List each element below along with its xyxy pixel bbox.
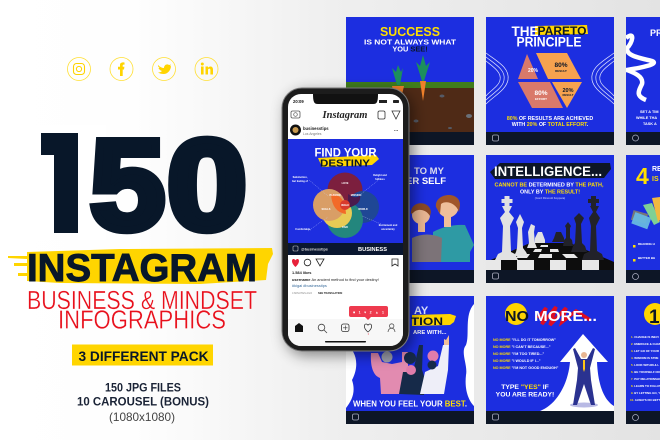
post header (290, 124, 399, 136)
chart: venn diagram: Comfortable, (295, 228, 311, 231)
yellow brush (318, 155, 379, 167)
big number 150: 0 (167, 114, 247, 257)
body text: TASK A (643, 122, 657, 126)
icon: footer instagram (492, 135, 498, 141)
yellow brush stroke (8, 248, 273, 284)
list: NO MORE "I WOULD IF I..." (493, 359, 541, 363)
chart: venn diagram: fullness (375, 178, 385, 181)
bullet list (633, 242, 655, 262)
caption: WHEN YOU FEEL YOUR BEST. (353, 400, 467, 408)
file details: 10 CAROUSEL (BONUS) (77, 396, 209, 408)
illustration: older man (433, 195, 474, 262)
post caption: username An ancient method to find your destiny! (292, 277, 379, 282)
heading: NO (505, 309, 529, 325)
soil (402, 88, 474, 132)
badge: 3 different pack: 3 DIFFERENT PACK (78, 348, 208, 364)
subheading (364, 40, 456, 52)
phone body (282, 88, 409, 351)
footer bar (486, 411, 614, 424)
subheading: ARE WITH... (413, 330, 447, 336)
heading: IS (652, 176, 659, 183)
footer bar (486, 270, 614, 283)
post footer strip: @businesstips (301, 248, 328, 252)
subheading: (Gord Rimondi Koppara) (535, 196, 565, 200)
chart: venn diagram: IKIGAI (341, 204, 349, 207)
chart: pareto shapes: 20% (528, 68, 539, 74)
icon: footer instagram (492, 273, 498, 279)
big number 150: 5 (90, 114, 165, 257)
chart: pareto shapes: 80% (534, 90, 548, 97)
post caption: SEE TRANSLATION (318, 291, 342, 295)
footer bar (626, 132, 660, 145)
icon: twitter (152, 58, 176, 80)
list: NO MORE "I CAN'T BECAUSE..." (493, 345, 551, 349)
icon: footer instagram (492, 414, 498, 420)
illustration: stacked books (631, 197, 660, 229)
status bar: 20:09 (293, 99, 304, 104)
heading: infographics: INFOGRAPHICS (58, 304, 226, 334)
panel: intelligence card (486, 155, 614, 283)
subheading: CANNOT BE DETERMINED BY THE PATH, (494, 182, 604, 188)
illustration: white arrow (540, 334, 614, 411)
chart: pareto shapes: EFFORT (535, 97, 547, 101)
post title: FIND YOUR (314, 148, 377, 160)
chart: venn diagram: Satisfaction, (293, 176, 308, 179)
heading: ER SELF (406, 176, 446, 187)
caption: WITH 20% OF TOTAL EFFORT. (512, 122, 589, 128)
white side brush (346, 304, 474, 408)
panel: success card (346, 17, 474, 145)
list: 10. ALWAYS DO BETT (630, 398, 660, 402)
notification bubble (349, 306, 388, 320)
heading (652, 166, 660, 181)
yellow circle (644, 303, 660, 325)
panel: cropped priority card (626, 17, 660, 145)
post footer strip (288, 243, 403, 255)
chart: pareto shapes: RESULT (555, 69, 567, 73)
red scribble (538, 307, 590, 325)
panel: no more card (486, 296, 614, 424)
icon: facebook (110, 58, 133, 80)
body text (636, 110, 658, 126)
phone mockup (282, 88, 409, 351)
heading (505, 309, 597, 325)
subheading: YOU SEE! (392, 44, 428, 54)
big number: 4 (636, 163, 649, 189)
body text: WHILE THA (636, 116, 657, 120)
subheading: ONLY BY THE RESULT! (520, 190, 580, 196)
heading (411, 305, 443, 328)
icon: small carrot (392, 65, 404, 92)
post title (314, 148, 377, 170)
chart: venn diagram: PAID (342, 226, 348, 229)
heading: PRINCIPLE (516, 34, 582, 50)
illustration: businessman (570, 348, 598, 408)
caption: 80% OF RESULTS ARE ACHIEVED (507, 116, 593, 122)
status bar (293, 94, 399, 104)
illustration: white chess pieces (495, 196, 545, 260)
body text: SET A TIM (640, 110, 658, 114)
bullet list: READING H (638, 242, 655, 246)
call to action: YOU ARE READY! (496, 392, 554, 398)
post image (288, 139, 403, 243)
illustration: chess board (486, 243, 614, 270)
yellow brush (412, 314, 456, 326)
file details: (1080x1080) (109, 410, 175, 424)
icon: large carrot (416, 55, 430, 101)
icon: instagram (68, 58, 90, 80)
footer bar (626, 270, 660, 283)
social icons (68, 58, 218, 80)
caption (507, 116, 593, 126)
chart: pareto shapes: RESULT (563, 93, 574, 97)
chart: venn diagram: Excitement and (379, 224, 398, 227)
list: NO MORE "I'M NOT GOOD ENOUGH" (493, 366, 559, 370)
footer bar (346, 411, 474, 424)
file details (77, 382, 209, 424)
post actions (292, 259, 398, 267)
list (493, 338, 559, 370)
footer bar (410, 132, 474, 145)
footer bar (410, 270, 474, 283)
post caption (292, 270, 379, 295)
post header: ... (394, 127, 399, 133)
chart: venn diagram: but feeling of (292, 180, 308, 183)
call to action (496, 384, 554, 398)
chart: pareto shapes (518, 53, 582, 108)
grass strip (346, 82, 474, 88)
heading: THE (512, 24, 538, 39)
white squiggle (626, 36, 654, 100)
heading: business and mindset: BUSINESS & MINDSET (27, 285, 257, 315)
heading: INTELLIGENCE... (494, 163, 602, 179)
panel: cropped ten habits card (626, 296, 660, 424)
icon: footer instagram (632, 414, 638, 420)
list (630, 335, 660, 402)
panel: cropped reading card (626, 155, 660, 283)
post caption: #kigai #businesstips (292, 283, 327, 288)
bottom navigation (288, 319, 403, 346)
list: 2. EMBRACE & CHAN (631, 342, 660, 346)
chart: pareto shapes: 20% (562, 88, 574, 94)
file details: 150 JPG FILES (105, 382, 181, 394)
footer bar (486, 132, 614, 145)
heading: TO MY (414, 166, 445, 177)
list: 4. WISDOM IS STRE (631, 356, 659, 360)
chart: venn diagram: LOVE (342, 182, 349, 185)
heading: instagram: INSTAGRAM (27, 247, 257, 290)
footer bar (626, 411, 660, 424)
icon: linkedin (195, 58, 218, 80)
heading: TION (411, 316, 443, 328)
list: 9. BY LETTING GO, Y (631, 391, 660, 395)
heading (512, 26, 586, 46)
chart: venn diagram: PASSION (329, 194, 341, 197)
subheading: IS NOT ALWAYS WHAT (364, 38, 457, 46)
list: 7. PAY RELATIONSHI (631, 377, 660, 381)
chart: venn diagram: uncertainty (381, 228, 395, 231)
list: NO MORE "I'M TOO TIRED..." (493, 352, 544, 356)
list: 5. LOOK WITHIN & L (631, 363, 659, 367)
illustration: navy friend (399, 345, 425, 395)
heading: PARETO (538, 26, 587, 38)
chart: venn diagram: MISSION (351, 194, 361, 197)
yellow circle (505, 303, 527, 325)
post title: DESTINY (320, 158, 370, 170)
illustration: pink friend (371, 352, 408, 394)
heading: MORE... (534, 309, 597, 325)
chart: venn diagram (292, 172, 398, 238)
post footer strip: BUSINESS (358, 247, 388, 253)
subheading (494, 182, 604, 200)
list: 3. LET GO OF YOUR (631, 349, 660, 353)
instagram top bar (291, 110, 400, 121)
chart: pareto shapes: 80% (554, 62, 568, 69)
panel: younger self card (410, 155, 474, 283)
big number 150: 1 (29, 114, 100, 257)
post header: Los Angeles (303, 132, 322, 136)
home indicator (325, 341, 366, 342)
panel: pareto card (486, 17, 614, 145)
icon: footer instagram (632, 274, 638, 280)
icon: footer instagram (352, 414, 358, 420)
panel: motivation card (346, 296, 474, 424)
list: 1. CHANGE IS INEVI (631, 335, 659, 339)
chart: venn diagram: SKILLS (322, 208, 331, 211)
illustration: black chess pieces (552, 196, 604, 260)
big number 150 (20, 114, 247, 257)
illustration: younger boy (411, 203, 442, 262)
heading: AY (414, 305, 429, 317)
wavy lines (486, 53, 614, 104)
post header: businesstips (303, 126, 329, 131)
post caption: 1.584 likes (292, 270, 311, 275)
notification bubble: ■ 1 ♥ 2 ▲ 1 (353, 310, 384, 314)
list: NO MORE "I'LL DO IT TOMORROW" (493, 338, 556, 342)
bullet list: BETTER BH (638, 256, 655, 260)
chart: venn diagram: WORLD (358, 208, 368, 211)
illustration: white jacket friend (420, 335, 449, 394)
heading (410, 168, 446, 184)
call to action: TYPE "YES" IF (501, 384, 549, 391)
brush highlight (535, 25, 588, 35)
big number: 1 (649, 307, 660, 328)
icon: footer instagram (632, 135, 638, 141)
instagram top bar: Instagram (322, 110, 367, 121)
heading: SUCCESS (380, 24, 440, 39)
phone screen (288, 94, 403, 346)
chart: venn diagram: Delight and (373, 174, 387, 177)
post caption: 4 MINUTES AGO (292, 291, 312, 295)
brush stroke (490, 163, 611, 179)
